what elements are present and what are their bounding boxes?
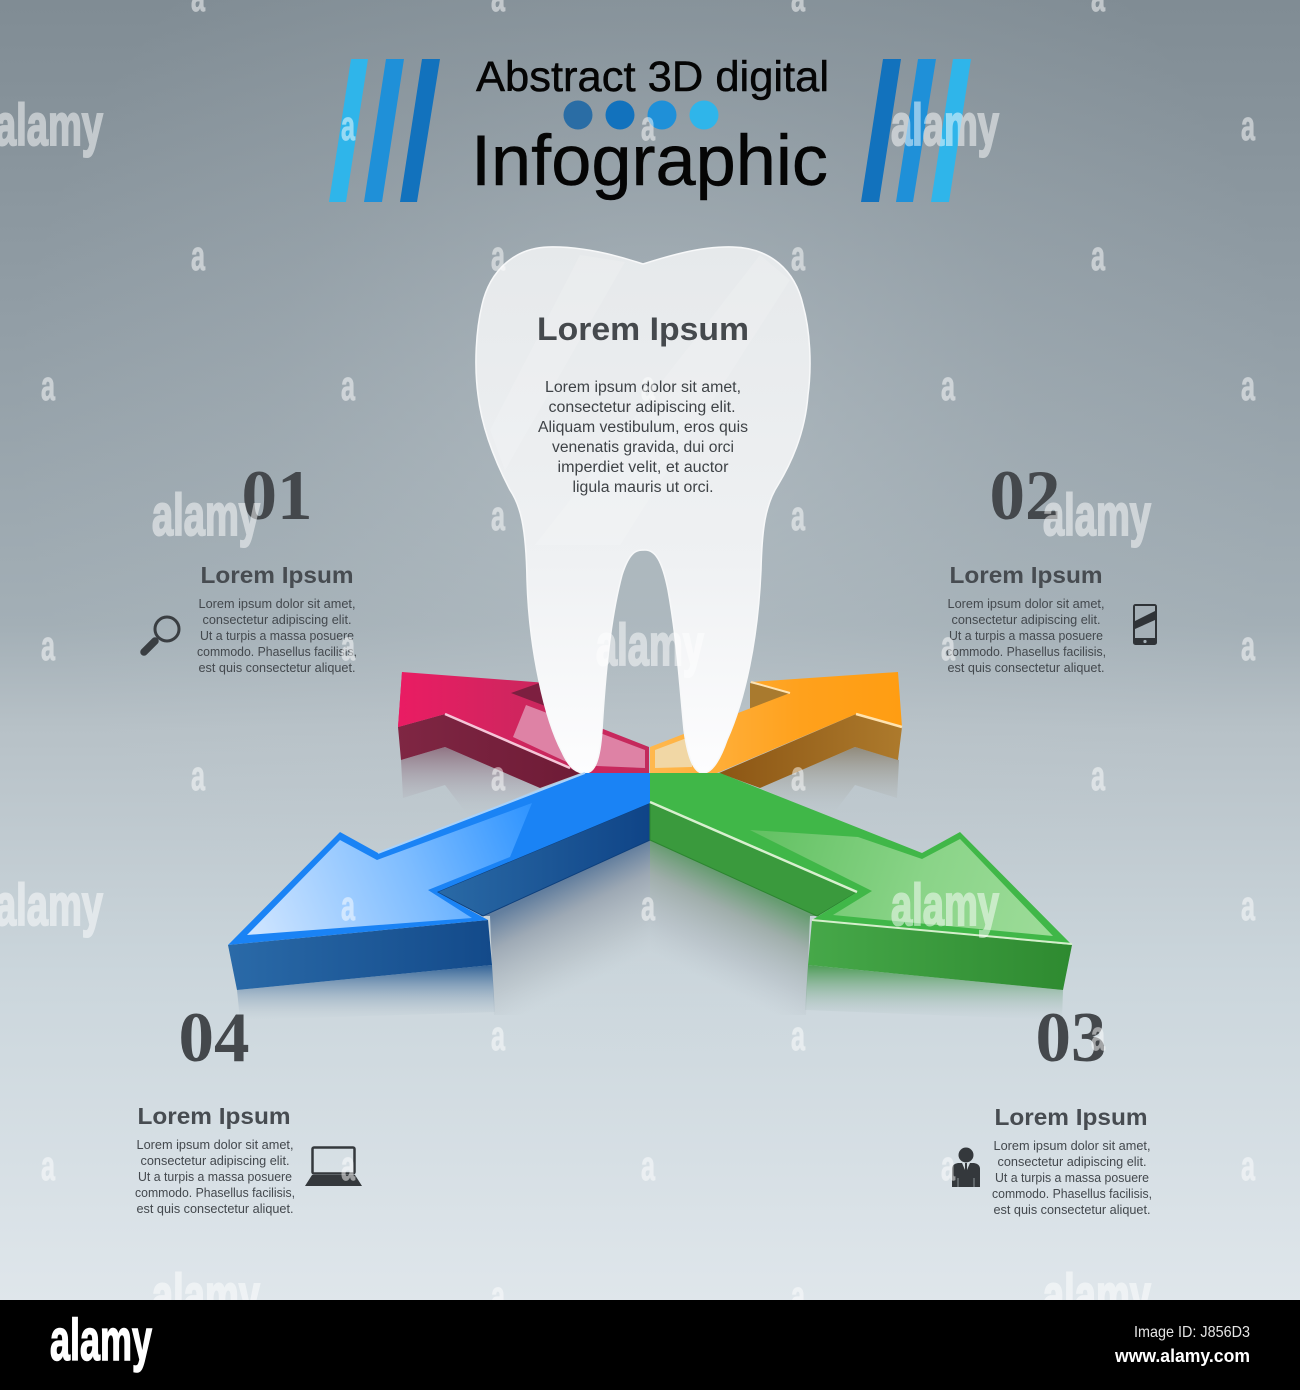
watermarks: a xyxy=(1091,1012,1105,1059)
watermarks: a xyxy=(791,232,805,279)
watermarks: a xyxy=(641,1142,655,1189)
number 03: 03 xyxy=(1036,999,1106,1077)
body 03: commodo. Phasellus facilisis, xyxy=(992,1187,1152,1201)
heading 02: Lorem Ipsum xyxy=(950,562,1102,588)
panel 04 xyxy=(135,999,362,1216)
watermarks: alamy xyxy=(596,613,704,678)
watermarks: a xyxy=(941,362,955,409)
watermarks: a xyxy=(791,1272,805,1319)
number 02: 02 xyxy=(990,457,1060,535)
body 03: est quis consectetur aliquet. xyxy=(994,1203,1150,1217)
watermarks: a xyxy=(1091,752,1105,799)
watermarks: alamy xyxy=(1043,483,1151,548)
watermarks: a xyxy=(1091,232,1105,279)
body 02: Ut a turpis a massa posuere xyxy=(949,629,1103,643)
watermarks: alamy xyxy=(891,93,999,158)
number 04: 04 xyxy=(178,999,250,1077)
glass reflections on tooth xyxy=(490,255,790,545)
body 01: Ut a turpis a massa posuere xyxy=(200,629,354,643)
image id: Image ID: J856D3 xyxy=(1134,1324,1250,1341)
body 01: consectetur adipiscing elit. xyxy=(202,613,352,627)
tooth shape xyxy=(476,247,810,773)
footer bar xyxy=(0,1300,1300,1390)
header: title with stripes and dots xyxy=(329,53,971,202)
panel 03 xyxy=(952,999,1152,1217)
body 04: consectetur adipiscing elit. xyxy=(140,1154,290,1168)
watermarks: a xyxy=(191,232,205,279)
icon: magnifier xyxy=(144,617,179,652)
watermarks: alamy xyxy=(1043,1263,1151,1328)
site url: www.alamy.com xyxy=(1114,1346,1250,1366)
icon: smartphone xyxy=(1133,604,1157,645)
watermarks: a xyxy=(341,1142,355,1189)
body 02: consectetur adipiscing elit. xyxy=(952,613,1100,627)
watermarks: alamy xyxy=(891,873,999,938)
watermarks: a xyxy=(791,752,805,799)
body 03: Ut a turpis a massa posuere xyxy=(995,1171,1149,1185)
number 01: 01 xyxy=(242,457,312,535)
tooth body text: consectetur adipiscing elit. xyxy=(548,399,736,416)
title line one: Abstract 3D digital xyxy=(476,53,829,101)
body 03: Lorem ipsum dolor sit amet, xyxy=(994,1139,1150,1153)
watermarks: a xyxy=(1241,622,1255,669)
body 04: Ut a turpis a massa posuere xyxy=(138,1170,292,1184)
watermarks: a xyxy=(641,362,655,409)
watermarks: a xyxy=(41,622,55,669)
heading 01: Lorem Ipsum xyxy=(200,562,354,588)
watermarks: alamy xyxy=(152,483,260,548)
arrow: green, lower right xyxy=(650,773,1072,990)
tooth body text: Lorem ipsum dolor sit amet, xyxy=(545,379,741,396)
heading 04: Lorem Ipsum xyxy=(138,1103,290,1129)
arrow: orange, upper right xyxy=(650,672,902,788)
watermarks: a xyxy=(641,882,655,929)
watermarks: a xyxy=(1241,102,1255,149)
body 01: commodo. Phasellus facilisis, xyxy=(197,645,357,659)
panel 01 xyxy=(144,457,357,675)
icon: businessman xyxy=(952,1148,980,1187)
tooth body text xyxy=(538,379,748,496)
tooth body text: ligula mauris ut orci. xyxy=(572,479,714,496)
watermarks: a xyxy=(791,1012,805,1059)
watermarks: a xyxy=(1241,1142,1255,1189)
icon: laptop xyxy=(305,1148,362,1186)
body 04: Lorem ipsum dolor sit amet, xyxy=(136,1138,294,1152)
body 02: est quis consectetur aliquet. xyxy=(948,661,1104,675)
tooth body text: imperdiet velit, et auctor xyxy=(558,459,728,476)
watermarks: a xyxy=(1241,362,1255,409)
watermarks: alamy xyxy=(152,1263,260,1328)
body 01: est quis consectetur aliquet. xyxy=(198,661,356,675)
body 04: commodo. Phasellus facilisis, xyxy=(135,1186,295,1200)
watermarks: a xyxy=(491,1272,505,1319)
watermarks: a xyxy=(791,492,805,539)
body 03 xyxy=(992,1139,1152,1217)
watermarks: a xyxy=(941,1142,955,1189)
title line two: Infographic xyxy=(471,122,828,201)
left stripes xyxy=(329,59,440,202)
watermarks: a xyxy=(491,492,505,539)
watermarks: a xyxy=(191,752,205,799)
watermarks: a xyxy=(641,102,655,149)
watermarks: a xyxy=(341,102,355,149)
watermarks: a xyxy=(491,752,505,799)
watermarks: a xyxy=(41,1142,55,1189)
watermarks: a xyxy=(491,232,505,279)
heading 03: Lorem Ipsum xyxy=(994,1104,1148,1130)
tooth body text: Aliquam vestibulum, eros quis xyxy=(538,419,748,436)
watermarks: a xyxy=(341,882,355,929)
arrow: blue, lower left xyxy=(228,773,650,990)
body 02: commodo. Phasellus facilisis, xyxy=(946,645,1106,659)
watermarks: a xyxy=(491,1012,505,1059)
panel 02 xyxy=(946,457,1157,675)
watermarks: a xyxy=(41,362,55,409)
body 02 xyxy=(946,597,1106,675)
body 02: Lorem ipsum dolor sit amet, xyxy=(948,597,1104,611)
body 04 xyxy=(135,1138,295,1216)
tooth with centre text xyxy=(476,247,810,773)
body 01: Lorem ipsum dolor sit amet, xyxy=(198,597,356,611)
tooth heading: Lorem Ipsum xyxy=(537,311,749,347)
arrow: red, upper left xyxy=(398,672,649,788)
row of four dots xyxy=(564,100,718,130)
watermarks: a xyxy=(941,622,955,669)
arrow reflections xyxy=(237,747,1063,1020)
watermarks: a xyxy=(1241,882,1255,929)
body 03: consectetur adipiscing elit. xyxy=(998,1155,1146,1169)
footer logo: alamy xyxy=(50,1308,152,1373)
tooth body text: venenatis gravida, dui orci xyxy=(552,439,734,456)
watermarks: a xyxy=(341,622,355,669)
watermarks: a xyxy=(341,362,355,409)
right stripes xyxy=(861,59,971,202)
body 04: est quis consectetur aliquet. xyxy=(136,1202,294,1216)
body 01 xyxy=(197,597,357,675)
